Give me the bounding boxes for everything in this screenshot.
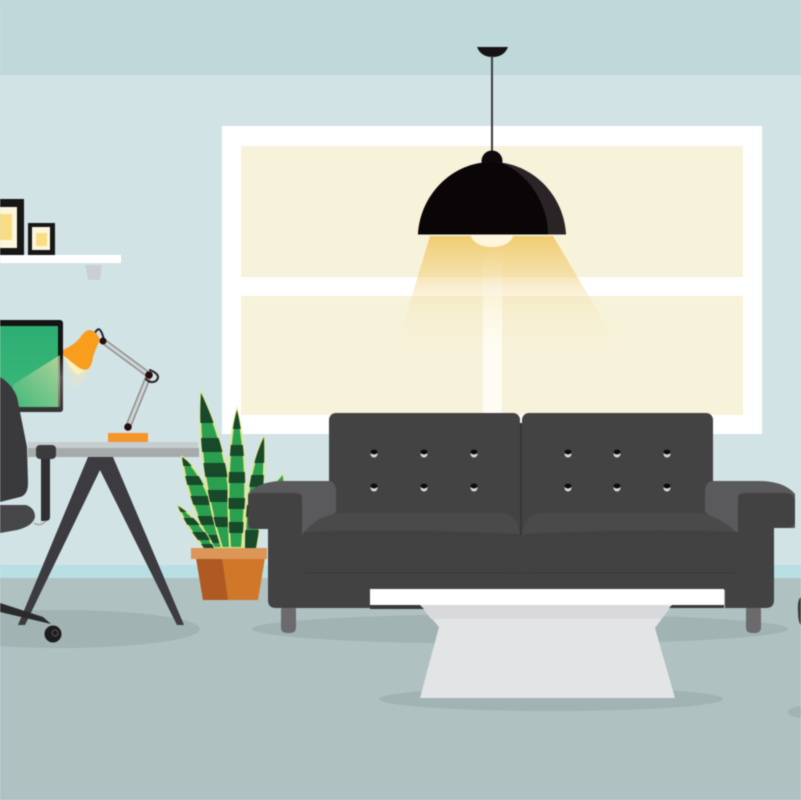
- light cone: [395, 236, 622, 352]
- bulb: [471, 223, 513, 247]
- sofa: [248, 413, 795, 633]
- ceiling band: [0, 0, 801, 75]
- leaf back left: [180, 455, 222, 548]
- dome shade: [418, 162, 566, 234]
- coffee table: [370, 589, 724, 698]
- lamp joints: [100, 338, 153, 431]
- picture frame small: [28, 223, 55, 255]
- sofa buttons: [370, 450, 670, 492]
- floor: [0, 578, 801, 800]
- office chair: [0, 377, 62, 642]
- leaf right: [244, 436, 266, 549]
- plant: [170, 390, 285, 600]
- wall: [0, 75, 801, 566]
- sofa arm inner sides: [248, 481, 795, 540]
- table underside shadow: [370, 605, 424, 609]
- pendant lamp: [395, 47, 622, 352]
- light beam: [65, 357, 90, 388]
- sofa back cushions: [329, 413, 713, 538]
- cord: [491, 56, 493, 154]
- chair caster: [44, 626, 62, 642]
- lamp arms: [95, 329, 158, 427]
- leaf low left: [176, 504, 215, 549]
- chair backrest: [0, 377, 28, 502]
- leaf centre: [226, 406, 247, 548]
- lamp shade: [63, 330, 100, 370]
- far right leaf: [260, 474, 285, 500]
- knob: [482, 150, 502, 172]
- chair base: [0, 603, 51, 624]
- right edge object: [798, 597, 801, 625]
- shelf bracket: [85, 265, 102, 280]
- sofa back frame: [330, 423, 712, 543]
- floor shadows: [0, 610, 801, 718]
- chair arm: [41, 456, 50, 521]
- baseboard: [0, 565, 801, 579]
- chair seat: [0, 505, 35, 533]
- leaf tall: [198, 389, 230, 548]
- sofa base: [268, 535, 774, 608]
- sofa legs: [281, 605, 761, 633]
- ceiling canopy: [477, 47, 508, 57]
- window: [222, 126, 762, 434]
- shelf board: [0, 255, 121, 263]
- mullion glow: [483, 250, 502, 296]
- desk lamp: [63, 329, 158, 443]
- lamp base: [108, 433, 148, 443]
- wall shelf with picture frames: [0, 199, 121, 280]
- pot: [191, 548, 267, 600]
- table base: [420, 605, 675, 698]
- desk legs: [18, 457, 184, 625]
- sofa arm fronts: [248, 493, 795, 560]
- monitor: [0, 320, 63, 412]
- desk: [18, 442, 199, 625]
- table top: [370, 589, 724, 605]
- sofa seat cushions: [303, 513, 738, 573]
- desk top: [28, 442, 198, 449]
- picture frame large: [0, 199, 24, 255]
